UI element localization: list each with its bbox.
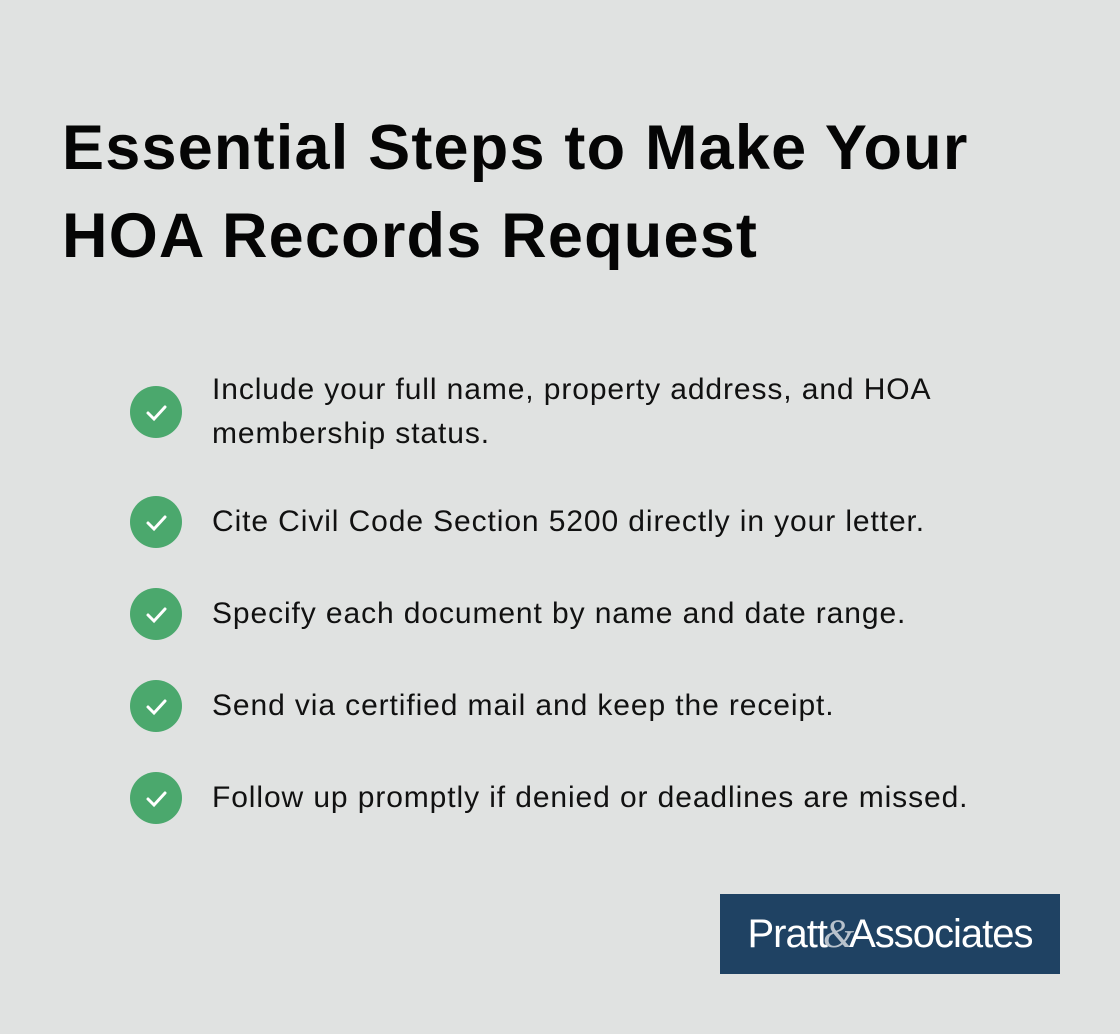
text: Cite Civil Code Section 5200 directly in your letter. (212, 505, 925, 538)
text: Specify each document by name and date range. (212, 597, 906, 630)
title (62, 113, 969, 271)
text: Follow up promptly if denied or deadlines are missed. (212, 781, 968, 814)
logo: Pratt&Associates (747, 911, 1033, 956)
logo (720, 894, 1060, 974)
item 1 (130, 373, 931, 450)
text: membership status. (212, 417, 490, 450)
icon: check (130, 680, 182, 732)
title: HOA Records Request (62, 201, 758, 271)
item 4 (130, 680, 834, 732)
icon: check (130, 772, 182, 824)
title: Essential Steps to Make Your (62, 113, 969, 183)
item 2 (130, 496, 925, 548)
text: Send via certified mail and keep the receipt. (212, 689, 834, 722)
text: Include your full name, property address, and HOA (212, 373, 931, 406)
icon: check (130, 386, 182, 438)
item 3 (130, 588, 906, 640)
item 5 (130, 772, 968, 824)
icon: check (130, 588, 182, 640)
icon: check (130, 496, 182, 548)
